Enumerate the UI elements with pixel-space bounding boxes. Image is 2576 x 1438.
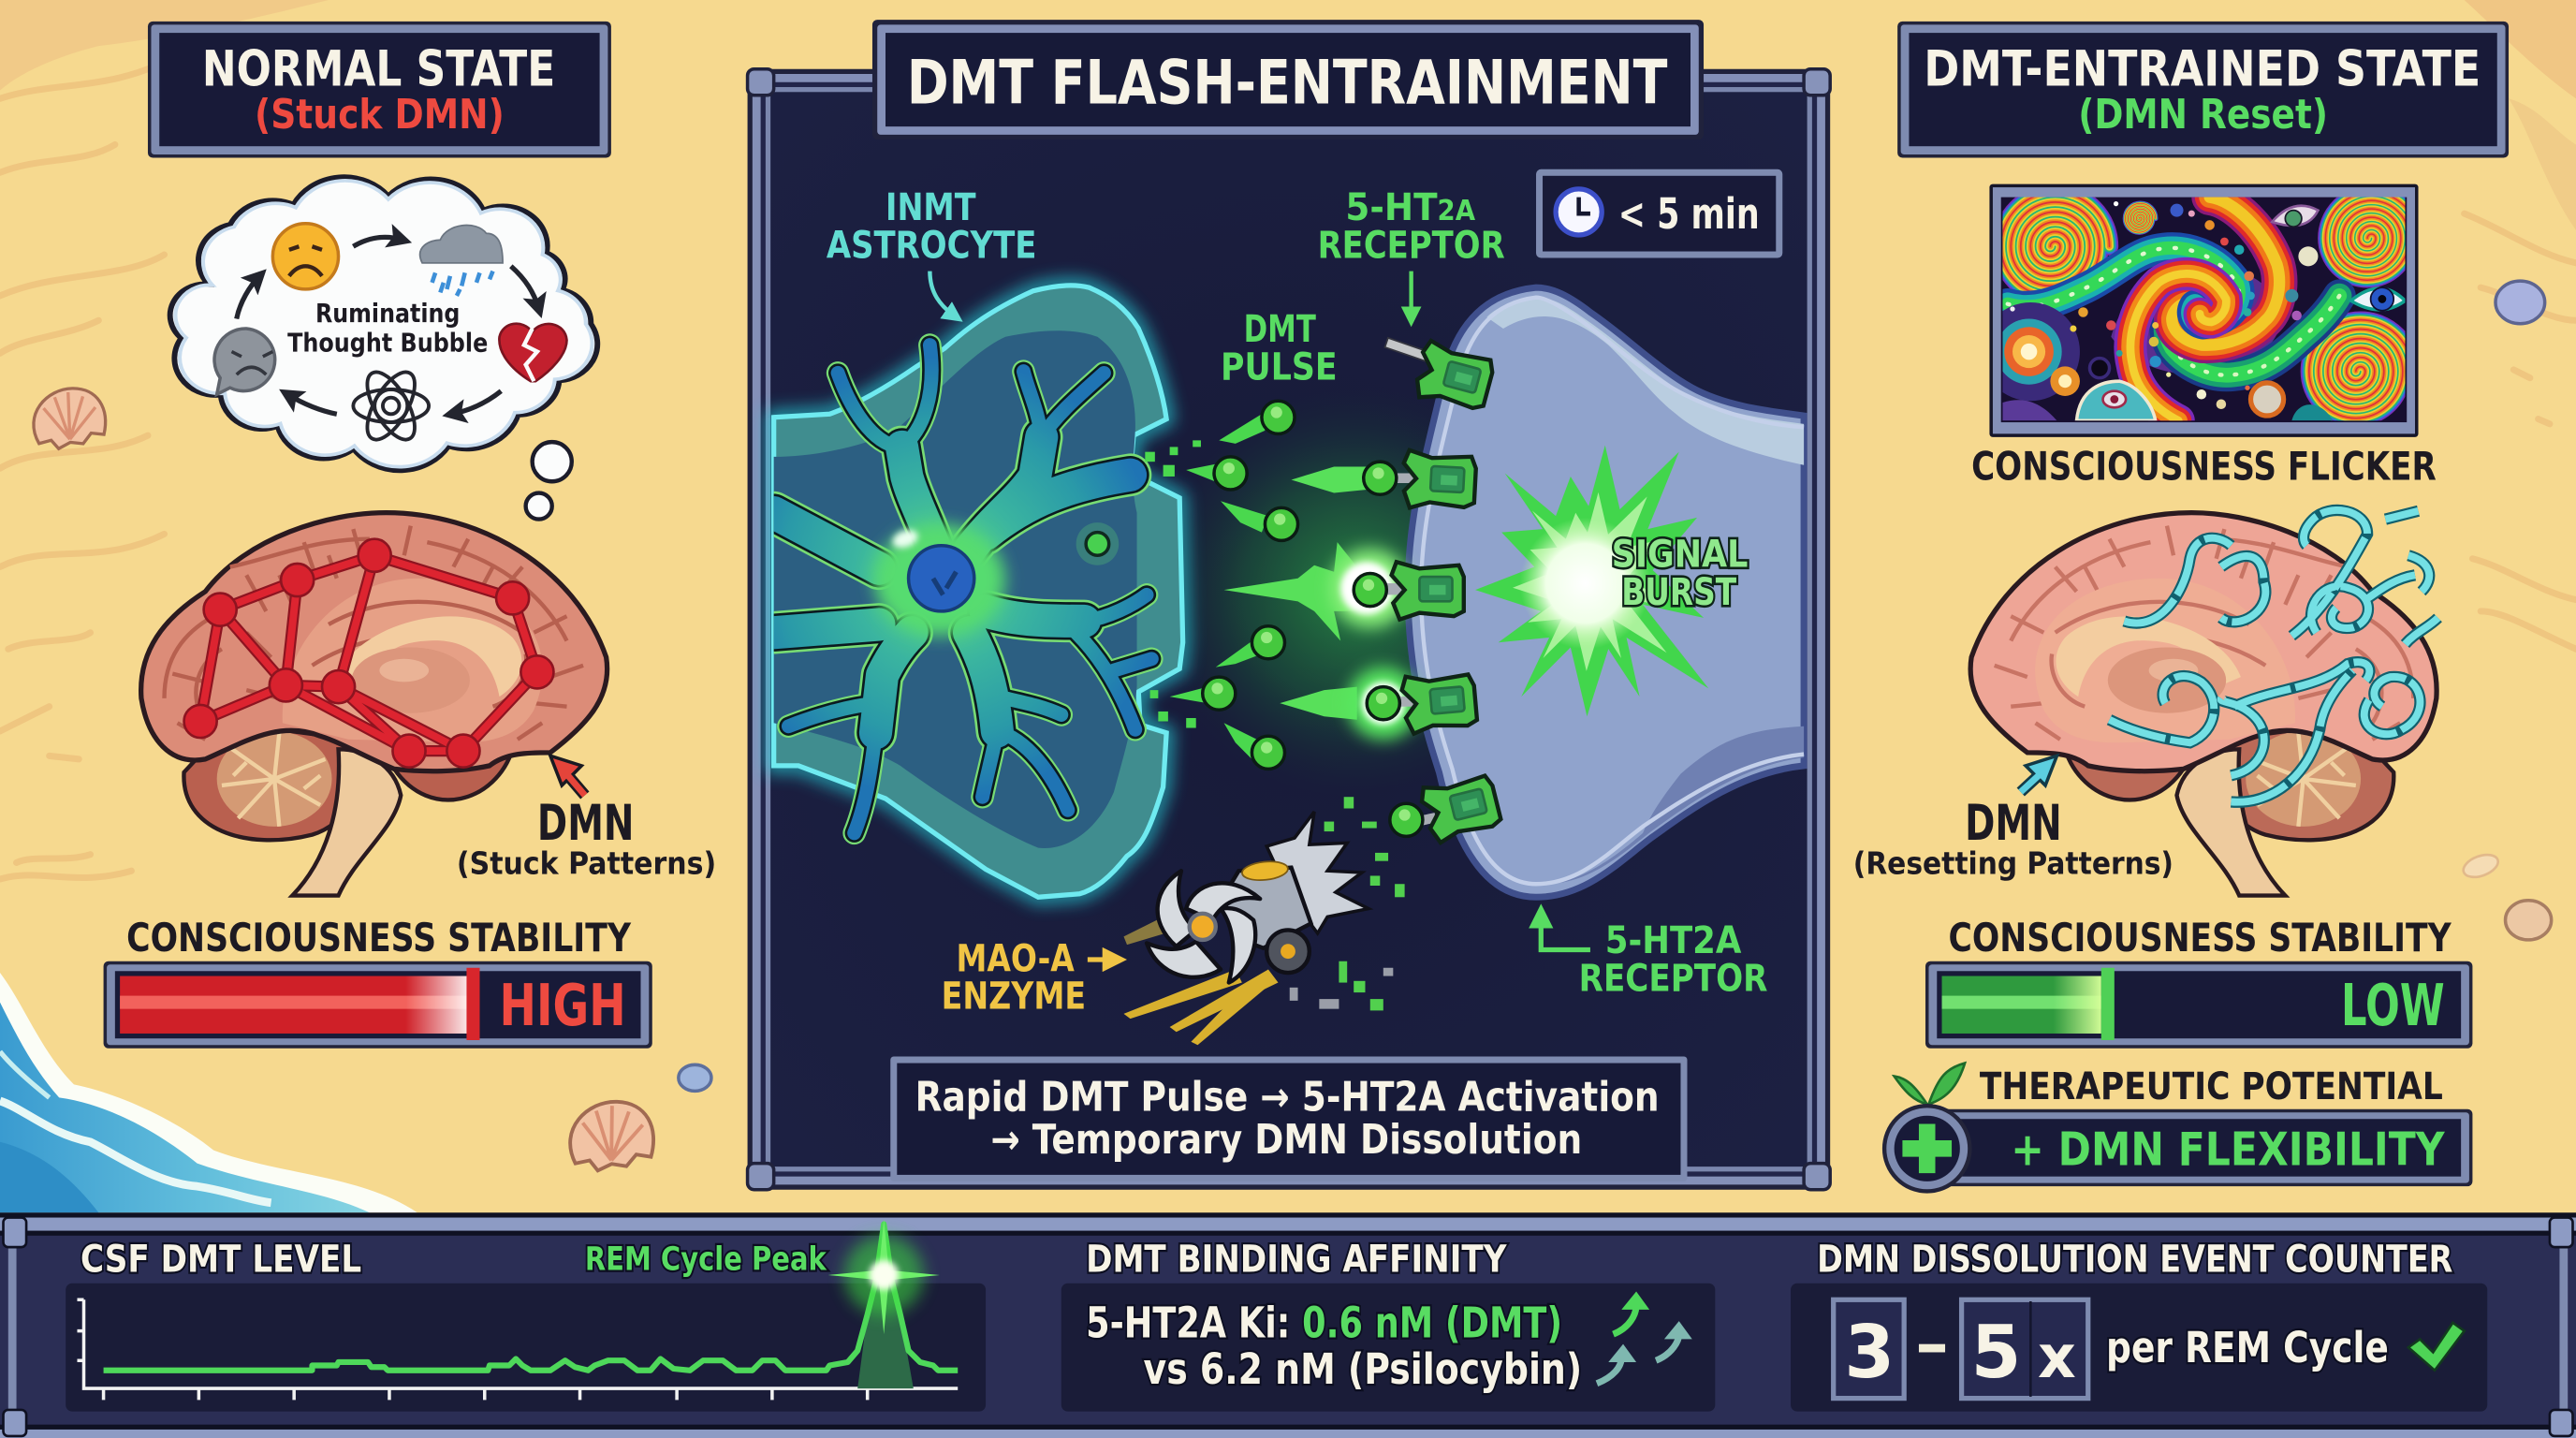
- astrocyte dendrites: [774, 345, 1151, 833]
- label: consciousness flicker: CONSCIOUSNESS FLICKER: [1971, 443, 2437, 489]
- loop arrows: [237, 237, 539, 414]
- arrow: to DMN: [550, 756, 585, 795]
- DMN dissolution event counter: [1791, 1237, 2487, 1412]
- galaxy: [2002, 302, 2112, 421]
- consciousness stability gauge: high: HIGH: [500, 973, 626, 1039]
- cell soma: [874, 524, 1005, 636]
- consciousness stability gauge: high: CONSCIOUSNESS STABILITY: [126, 915, 631, 961]
- panel: normal state title: NORMAL STATE: [202, 40, 555, 97]
- debris: [1325, 797, 1405, 1010]
- yellow exhaust trails: [1123, 914, 1278, 1045]
- label: INMT astrocyte: ASTROCYTE: [827, 224, 1036, 268]
- label: INMT astrocyte: [827, 185, 1036, 317]
- icon: clock: [1556, 189, 1602, 235]
- label: 5-HT2A receptor bottom: [1541, 914, 1767, 1000]
- label: DMN resetting patterns: [1853, 795, 2174, 882]
- DMT binding affinity: vs 6.2 nM (Psilocybin): [1144, 1344, 1582, 1394]
- CSF DMT level chart: REM Cycle Peak: [585, 1240, 827, 1279]
- panel: DMT-entrained state title: [1897, 22, 2509, 157]
- panel: DMT flash-entrainment: [748, 69, 1830, 1190]
- flexibility bar: + DMN FLEXIBILITY: [2011, 1122, 2446, 1176]
- arrow: to DMN reset: [2021, 756, 2056, 792]
- panel: bottom status bar: [0, 1212, 2576, 1438]
- panel: normal state title: [148, 22, 611, 157]
- CSF DMT level chart: [66, 1219, 986, 1412]
- flexibility bar: [1906, 1109, 2472, 1186]
- seashells and pebbles: [29, 281, 2552, 1173]
- counter digit 3: [1834, 1299, 1904, 1399]
- 5-HT2A receptors with bound DMT: [1224, 338, 1502, 844]
- axes: [77, 1299, 958, 1400]
- timer badge: [1536, 169, 1782, 258]
- turbine blades: [1147, 871, 1260, 983]
- CSF DMT level chart: CSF DMT LEVEL: [80, 1237, 361, 1281]
- bubble label: Thought Bubble: [287, 330, 488, 359]
- label: MAO-A enzyme: MAO-A: [956, 936, 1075, 980]
- brain: stuck default mode network: [141, 513, 607, 896]
- label: DMT pulse: PULSE: [1221, 345, 1338, 389]
- organelle: [1076, 522, 1119, 565]
- label: 5-HT2A receptor bottom: RECEPTOR: [1579, 956, 1767, 1000]
- main title banner: [872, 20, 1704, 139]
- counter digit 3: 3: [1844, 1311, 1895, 1395]
- cyan dissolving swirls: [2110, 510, 2438, 802]
- icon: sad speech face: [214, 329, 275, 394]
- label: DMT pulse: [1221, 307, 1338, 389]
- brain: resetting default mode network: [1970, 510, 2438, 896]
- label: 5-HT2A receptor top: [1318, 185, 1505, 318]
- signal burst: BURST: [1621, 570, 1737, 614]
- icon: tangled knot: [353, 365, 429, 447]
- counter digits 5x: x: [2038, 1322, 2076, 1391]
- summary caption box: → Temporary DMN Dissolution: [990, 1116, 1582, 1164]
- label: INMT astrocyte: INMT: [886, 185, 976, 229]
- icon: sad face: [272, 224, 339, 289]
- nucleus: [909, 546, 974, 611]
- star dots: [2010, 201, 2302, 409]
- green glow: [1166, 304, 1544, 879]
- wheel: [1266, 930, 1310, 973]
- dash: [1919, 1344, 1945, 1352]
- consciousness stability gauge: high: [104, 915, 652, 1049]
- machine body: [1224, 868, 1311, 948]
- therapeutic potential: [1884, 1064, 2472, 1191]
- label: 5-HT2A receptor top: RECEPTOR: [1318, 224, 1505, 268]
- label: DMN resetting patterns: DMN: [1965, 795, 2062, 852]
- DMN dissolution event counter: per REM Cycle: [2106, 1323, 2389, 1372]
- purple haze backdrop: [2111, 277, 2276, 373]
- data line: [104, 1225, 958, 1371]
- panel: DMT-entrained state title: (DMN Reset): [2078, 91, 2328, 139]
- postsynaptic terminal: [1408, 287, 1804, 897]
- therapeutic potential: THERAPEUTIC POTENTIAL: [1980, 1064, 2443, 1108]
- icon: affinity arrows: [1597, 1292, 1692, 1384]
- bubble label: [287, 300, 488, 359]
- eye motifs and planets: [2272, 206, 2318, 226]
- DMN dissolution event counter: DMN DISSOLUTION EVENT COUNTER: [1817, 1237, 2452, 1281]
- cytoplasm interior: [774, 330, 1137, 848]
- panel: normal state title: (Stuck DMN): [255, 91, 505, 139]
- consciousness stability gauge: low: LOW: [2341, 973, 2445, 1039]
- counter digits 5x: [1962, 1299, 2088, 1399]
- label: DMN stuck patterns: DMN: [537, 795, 634, 852]
- peak star: [828, 1219, 940, 1334]
- DMT binding affinity: [1061, 1237, 1715, 1412]
- peak fill: [857, 1257, 914, 1388]
- label: DMN stuck patterns: [457, 795, 716, 882]
- signal burst: [1475, 446, 1748, 716]
- signal burst: SIGNAL: [1612, 533, 1748, 577]
- label: DMN resetting patterns: (Resetting Patterns): [1853, 845, 2174, 882]
- label: DMT pulse: DMT: [1244, 307, 1316, 351]
- label: DMN stuck patterns: (Stuck Patterns): [457, 845, 716, 882]
- thought bubble trail: [526, 442, 572, 520]
- DMT binding affinity: DMT BINDING AFFINITY: [1086, 1237, 1507, 1281]
- icon: rain cloud: [420, 226, 503, 296]
- summary caption box: Rapid DMT Pulse → 5-HT2A Activation: [915, 1073, 1660, 1121]
- timer badge: < 5 min: [1618, 189, 1760, 239]
- corner studs: [748, 69, 1830, 1190]
- corner rivets: [4, 1218, 2572, 1436]
- DMT binding affinity: 5-HT2A Ki: 0.6 nM (DMT): [1086, 1299, 1562, 1348]
- icon: sprout: [1895, 1064, 1965, 1104]
- icon: broken heart: [499, 324, 567, 381]
- main title banner: DMT FLASH-ENTRAINMENT: [907, 49, 1667, 119]
- icon: check mark: [2408, 1323, 2465, 1371]
- astrocyte cell: [774, 286, 1183, 897]
- label: 5-HT2A receptor top: 5-HT2A: [1345, 185, 1475, 229]
- consciousness stability gauge: low: CONSCIOUSNESS STABILITY: [1949, 915, 2452, 961]
- counter digits 5x: 5: [1971, 1311, 2021, 1395]
- MAO-A enzyme machine: [1123, 797, 1405, 1045]
- consciousness stability gauge: low: [1925, 915, 2472, 1049]
- label: MAO-A enzyme: [942, 936, 1117, 1019]
- label: MAO-A enzyme: ENZYME: [942, 975, 1086, 1019]
- icon: plus badge: [1884, 1106, 1969, 1191]
- bubble label: Ruminating: [315, 300, 460, 329]
- summary caption box: [890, 1057, 1687, 1181]
- spiked drum: [1266, 812, 1368, 933]
- consciousness flicker image: [1982, 184, 2419, 437]
- panel: DMT-entrained state title: DMT-ENTRAINED STATE: [1924, 40, 2481, 97]
- sea: [0, 973, 417, 1212]
- label: 5-HT2A receptor bottom: 5-HT2A: [1605, 918, 1742, 962]
- thought bubble: ruminating loop: [170, 177, 597, 471]
- red DMN network: [184, 539, 553, 768]
- DMT pulse particles: [1145, 401, 1298, 769]
